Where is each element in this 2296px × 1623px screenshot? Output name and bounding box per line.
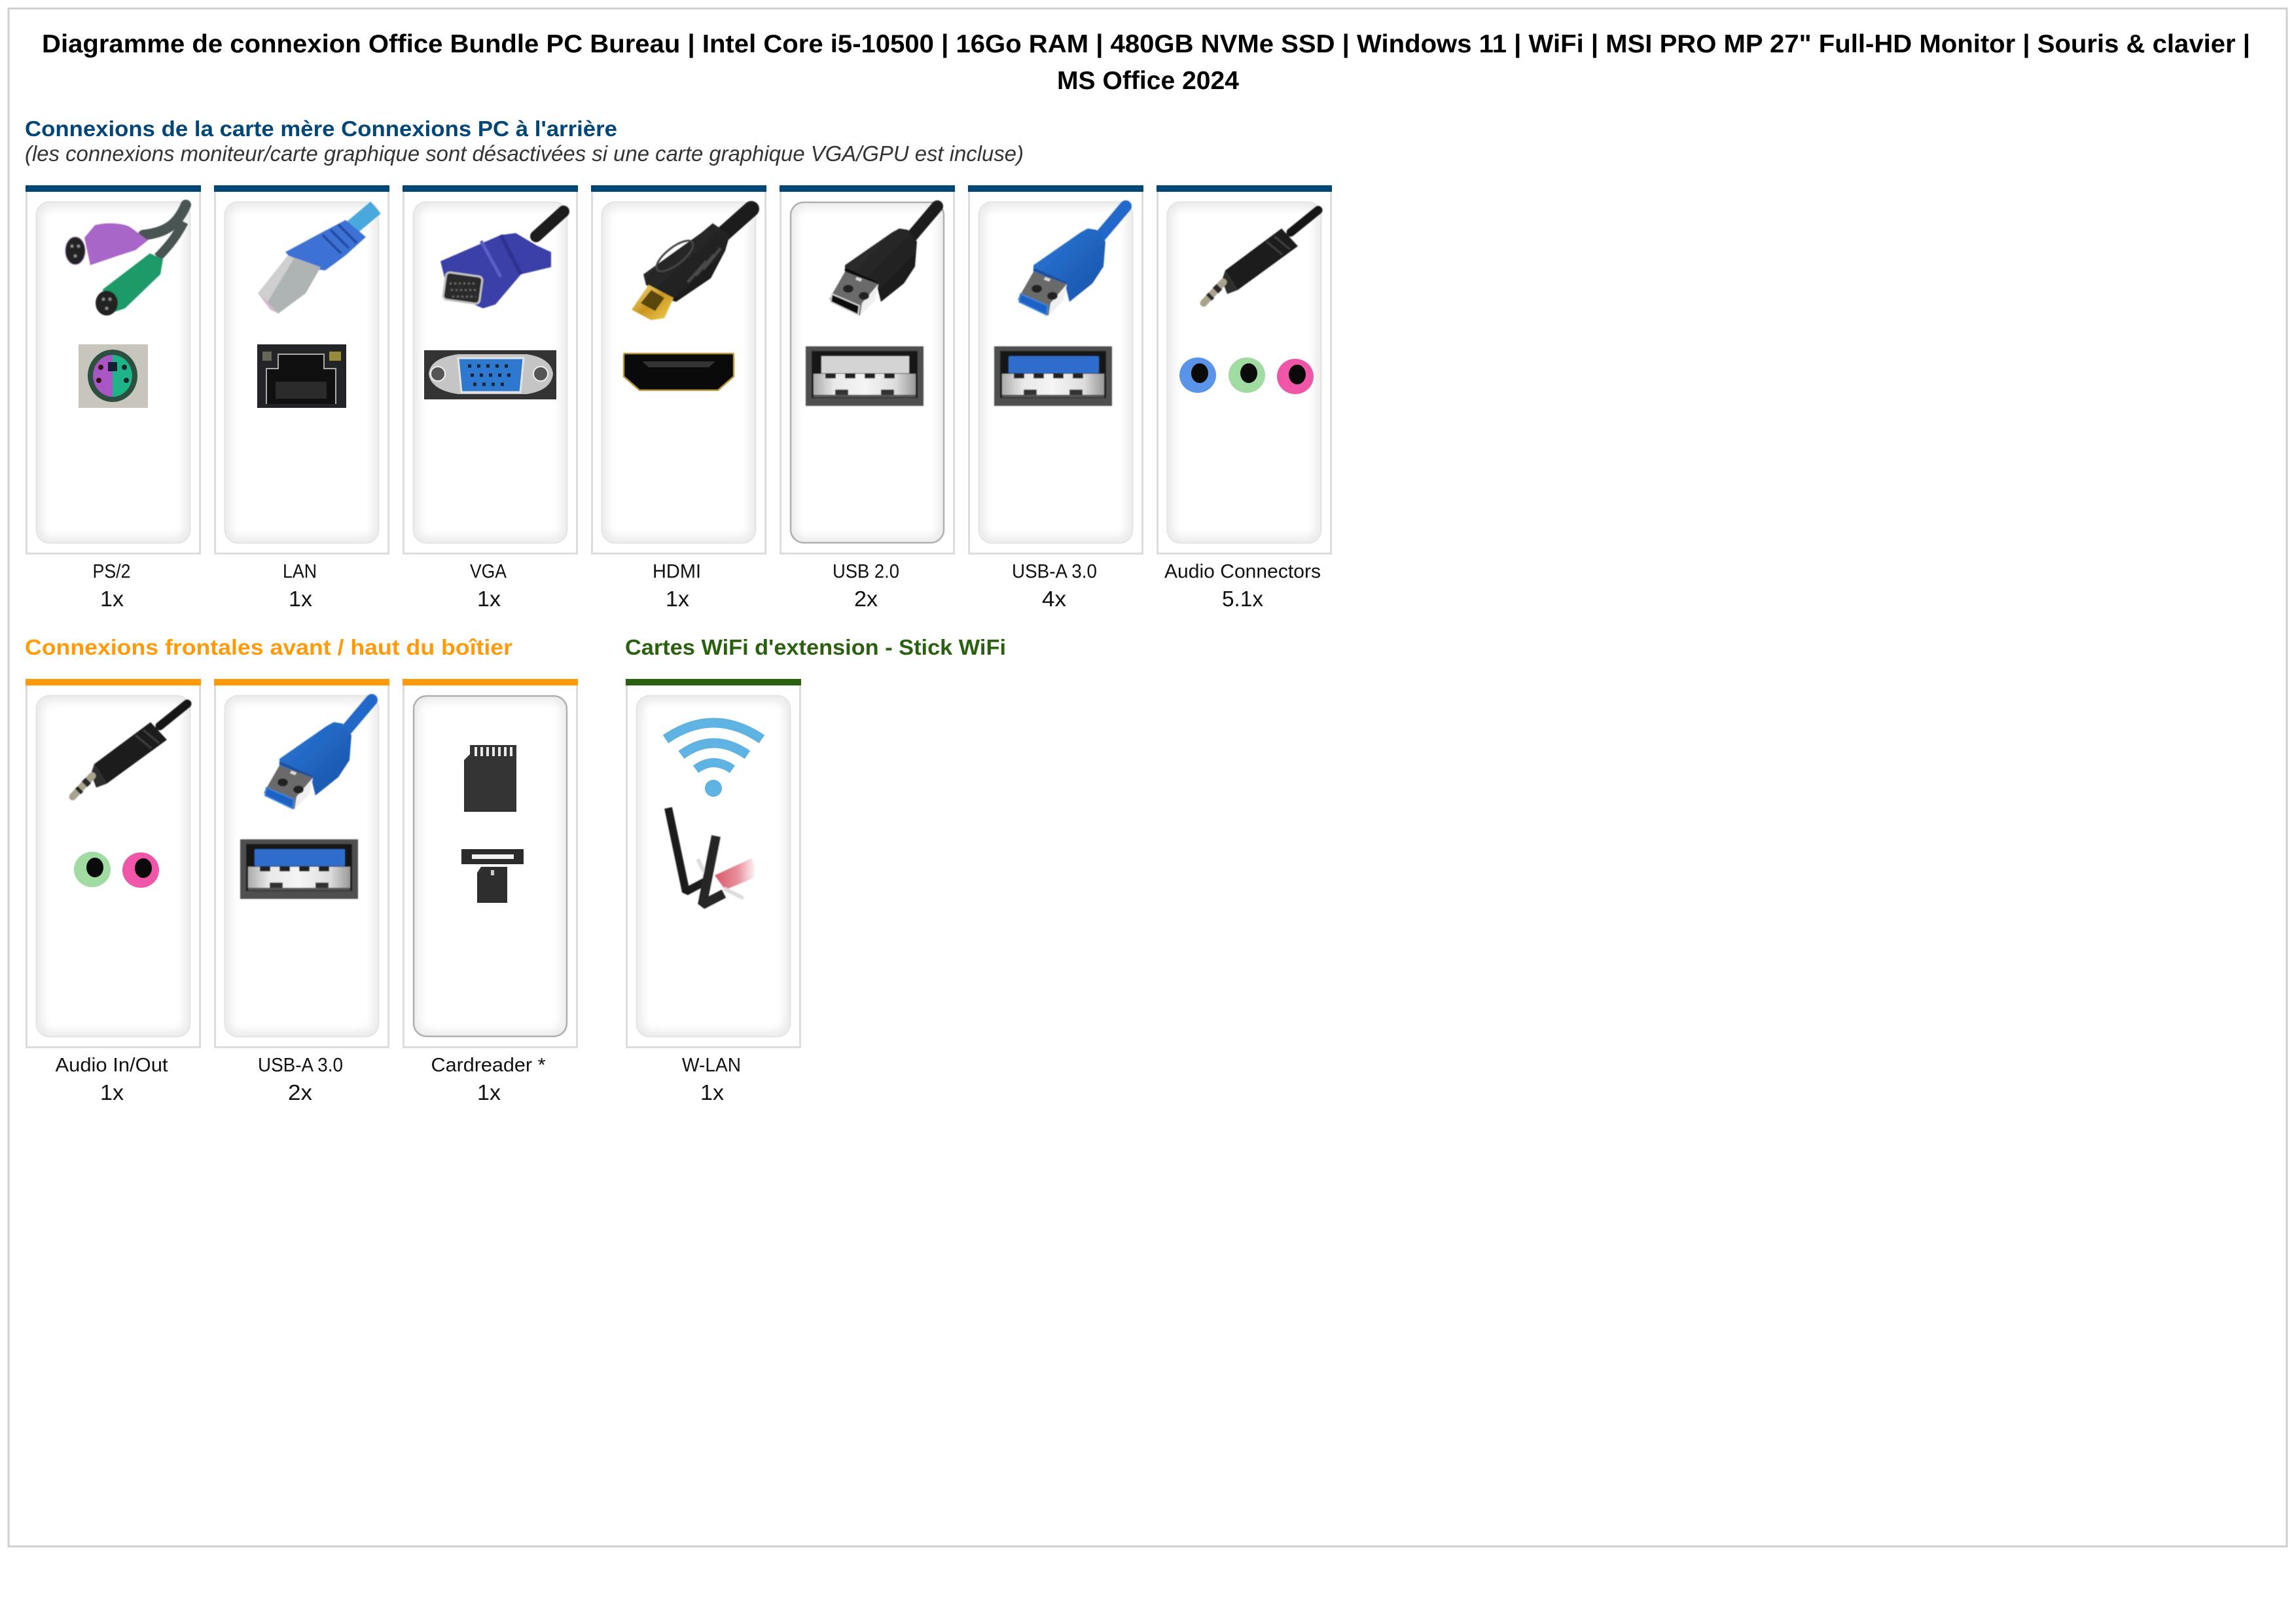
heading: WiFi cards: Cartes WiFi d'extension - Stick WiFi bbox=[625, 635, 1006, 659]
icon: USB 2.0 plug bbox=[829, 206, 937, 316]
label: USB-A 3.0: 4x bbox=[1042, 587, 1067, 611]
icon: PS/2 port bbox=[79, 344, 148, 408]
icon: RJ45 plug bbox=[258, 208, 376, 314]
panel: USB-A 3.0 rear bbox=[968, 185, 1143, 611]
label: USB-A 3.0: 2x bbox=[288, 1080, 313, 1104]
label: USB-A 3.0: USB-A 3.0 bbox=[258, 1054, 343, 1076]
panel: USB-A 3.0 front bbox=[214, 679, 389, 1104]
panel: Audio Connectors bbox=[1157, 185, 1332, 611]
icon: VGA plug bbox=[440, 211, 564, 308]
label: W-LAN bbox=[682, 1054, 741, 1104]
icon: HDMI port bbox=[624, 354, 734, 390]
icon: audio plug bbox=[73, 704, 187, 797]
icon: VGA port bbox=[424, 350, 556, 399]
panel: W-LAN bbox=[626, 679, 801, 1104]
icon: USB 3.0 port bbox=[240, 839, 358, 899]
label: VGA bbox=[470, 560, 507, 611]
panel: VGA bbox=[403, 185, 578, 611]
label: VGA: VGA bbox=[470, 560, 507, 583]
label: Cardreader: 1x bbox=[477, 1080, 501, 1104]
label: HDMI: HDMI bbox=[653, 560, 701, 583]
heading: rear connections bbox=[25, 117, 1024, 166]
label: PS/2: 1x bbox=[100, 587, 124, 611]
label: W-LAN: W-LAN bbox=[682, 1054, 741, 1076]
label: Audio Connectors bbox=[1164, 560, 1321, 611]
label: LAN: LAN bbox=[283, 560, 317, 583]
icon: audio jacks bbox=[1179, 357, 1314, 394]
label: PS/2 bbox=[93, 560, 131, 611]
label: USB-A 3.0 bbox=[258, 1054, 343, 1104]
label: W-LAN: 1x bbox=[700, 1080, 725, 1104]
title bbox=[42, 30, 2250, 95]
panel: PS/2 bbox=[26, 185, 201, 611]
label: Audio In/Out: 1x bbox=[100, 1080, 124, 1104]
icon: audio jacks bbox=[74, 852, 159, 888]
label: Audio In/Out bbox=[55, 1054, 168, 1104]
label: USB-A 3.0 bbox=[1012, 560, 1097, 611]
label: Cardreader: Cardreader * bbox=[431, 1054, 546, 1076]
icon: HDMI plug bbox=[632, 209, 751, 320]
label: HDMI: 1x bbox=[666, 587, 690, 611]
label: VGA: 1x bbox=[477, 587, 501, 611]
label: USB 2.0 bbox=[833, 560, 899, 611]
label: USB-A 3.0: USB-A 3.0 bbox=[1012, 560, 1097, 583]
heading: front connections: Connexions frontales avant / haut du boîtier bbox=[25, 635, 512, 659]
panel: HDMI bbox=[591, 185, 766, 611]
title: MS Office 2024 bbox=[1057, 67, 1240, 95]
icon: USB 3.0 port bbox=[994, 346, 1112, 406]
icon: USB 2.0 port bbox=[806, 346, 924, 406]
icon: USB 3.0 plug bbox=[264, 700, 372, 809]
label: PS/2: PS/2 bbox=[93, 560, 131, 583]
heading: rear connections: (les connexions moniteur/carte graphique sont désactivées si une carte graphique VGA/GPU est incluse) bbox=[25, 141, 1024, 166]
icon: SD card bbox=[464, 745, 516, 812]
panel: Audio In/Out bbox=[26, 679, 201, 1104]
label: Audio Connectors: Audio Connectors bbox=[1164, 560, 1321, 583]
panel: Cardreader bbox=[403, 679, 578, 1104]
icon: LAN port bbox=[257, 344, 346, 408]
heading: rear connections: Connexions de la carte mère Connexions PC à l'arrière bbox=[25, 117, 617, 141]
icon: antenna card bbox=[668, 808, 757, 905]
icon: WiFi symbol bbox=[666, 723, 762, 797]
panel: LAN bbox=[214, 185, 389, 611]
panel: USB 2.0 bbox=[780, 185, 955, 611]
label: HDMI bbox=[653, 560, 701, 611]
icon: audio plug bbox=[1204, 210, 1318, 303]
title: Diagramme de connexion Office Bundle PC Bureau | Intel Core i5-10500 | 16Go RAM | 480GB NVMe SSD | Windows 11 | WiFi | MSI PRO MP 27" Full-HD Monitor | Souris & clavier | bbox=[42, 30, 2250, 58]
label: Cardreader bbox=[431, 1054, 546, 1104]
icon: card slot bbox=[461, 849, 524, 903]
label: Audio In/Out: Audio In/Out bbox=[55, 1054, 168, 1076]
icon: PS/2 plugs bbox=[65, 205, 186, 316]
icon: USB 3.0 plug bbox=[1018, 206, 1126, 316]
label: LAN: 1x bbox=[289, 587, 313, 611]
label: USB 2.0: USB 2.0 bbox=[833, 560, 899, 583]
label: LAN bbox=[283, 560, 317, 611]
label: USB 2.0: 2x bbox=[854, 587, 878, 611]
label: Audio Connectors: 5.1x bbox=[1222, 587, 1264, 611]
